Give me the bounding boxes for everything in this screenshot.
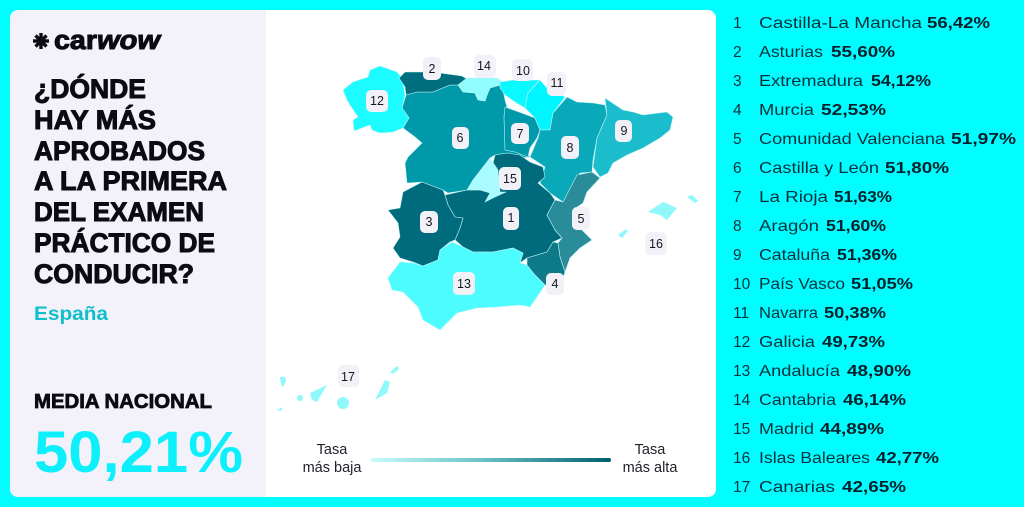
rank 2 <box>733 44 895 61</box>
rank 3 <box>733 73 931 90</box>
label 10: 10 <box>516 64 530 78</box>
region: Cantabria <box>458 78 503 101</box>
rank 1: 1 <box>733 15 742 32</box>
rank 1: Castilla-La Mancha <box>759 15 922 32</box>
region: Islas Baleares <box>618 195 698 238</box>
label 14 <box>474 55 496 78</box>
rank 5: Comunidad Valenciana <box>759 131 945 148</box>
label 16 <box>645 232 667 255</box>
legend: colour scale <box>303 442 678 476</box>
rank 9 <box>733 247 897 264</box>
rank 12: Galicia <box>759 334 815 351</box>
map of Spain <box>277 66 698 411</box>
panel: white map card <box>10 10 716 497</box>
rank 10 <box>733 276 913 293</box>
rank 15: 15 <box>733 421 750 438</box>
rank 2: Asturias <box>759 44 823 61</box>
title <box>34 73 227 289</box>
rank 17 <box>733 479 906 496</box>
rank 12: 49,73% <box>822 334 885 351</box>
rank 6: 6 <box>733 160 742 177</box>
region: Canarias <box>277 366 399 411</box>
map number labels <box>338 55 667 387</box>
region: Aragón <box>530 97 607 202</box>
ranking list <box>733 15 1016 496</box>
rank 16: Islas Baleares <box>759 450 870 467</box>
rank 14 <box>733 392 906 409</box>
national average value: 50,21% <box>34 420 243 485</box>
rank 17: Canarias <box>759 479 835 496</box>
rank 6: Castilla y León <box>759 160 879 177</box>
rank 7: 7 <box>733 189 742 206</box>
label 16: 16 <box>649 237 663 251</box>
region: Comunidad Valenciana <box>547 172 600 272</box>
rank 5: 5 <box>733 131 742 148</box>
label 13 <box>453 272 475 295</box>
label 9 <box>615 120 632 142</box>
title: DEL EXAMEN <box>34 197 204 227</box>
heading: media nacional: MEDIA NACIONAL <box>34 391 212 413</box>
label 3 <box>420 211 438 233</box>
legend high label: Tasa <box>635 442 666 458</box>
legend gradient bar <box>371 458 611 462</box>
rank 9: 9 <box>733 247 742 264</box>
rank 11 <box>733 305 886 322</box>
rank 11: 11 <box>733 305 749 322</box>
rank 15: Madrid <box>759 421 814 438</box>
title: ¿DÓNDE <box>34 73 146 104</box>
label 8: 8 <box>567 141 574 155</box>
logo wordmark <box>54 25 162 55</box>
label 6 <box>452 127 469 149</box>
region: País Vasco <box>500 80 540 108</box>
label 17 <box>338 365 359 387</box>
rank 15 <box>733 421 884 438</box>
region: Castilla y León <box>402 85 530 193</box>
rank 13: Andalucía <box>759 363 840 380</box>
rank 3: Extremadura <box>759 73 863 90</box>
rank 1: 56,42% <box>927 15 990 32</box>
rank 11: 50,38% <box>824 305 886 322</box>
rank 8 <box>733 218 886 235</box>
legend high label: más alta <box>623 460 678 476</box>
rank 13 <box>733 363 911 380</box>
rank 6: 51,80% <box>885 160 949 177</box>
rank 17: 17 <box>733 479 750 496</box>
label 3: 3 <box>426 215 433 229</box>
label 12: 12 <box>370 94 384 108</box>
rank 8: 8 <box>733 218 742 235</box>
rank 8: 51,60% <box>826 218 886 235</box>
region: Andalucía <box>388 242 545 330</box>
label 7: 7 <box>517 127 524 141</box>
region: Asturias <box>399 72 467 95</box>
rank 15: 44,89% <box>820 421 884 438</box>
logo wordmark: car <box>54 25 98 55</box>
rank 17: 42,65% <box>842 479 906 496</box>
rank 10: 51,05% <box>851 276 913 293</box>
rank 13: 13 <box>733 363 750 380</box>
rank 7: La Rioja <box>759 189 828 206</box>
label 5 <box>572 207 590 230</box>
region: Cataluña <box>593 98 673 177</box>
title: PRÁCTICO DE <box>34 227 215 258</box>
rank 4 <box>733 102 886 119</box>
region: Navarra <box>525 80 565 130</box>
label 11 <box>547 72 566 96</box>
rank 16: 16 <box>733 450 750 467</box>
rank 12: 12 <box>733 334 750 351</box>
rank 4: 52,53% <box>821 102 886 119</box>
rank 14: Cantabria <box>759 392 836 409</box>
logo wordmark: wow <box>97 25 162 55</box>
label 7 <box>511 123 529 144</box>
rank 5 <box>733 131 1016 148</box>
logo: carwow <box>33 25 162 55</box>
legend low label: más baja <box>303 460 362 476</box>
region: Extremadura <box>388 182 463 266</box>
label 17: 17 <box>341 370 355 384</box>
label 10 <box>512 59 533 81</box>
icon: carwow asterisk <box>33 33 49 49</box>
rank 14: 14 <box>733 392 751 409</box>
rank 10: País Vasco <box>759 276 845 293</box>
label 2: 2 <box>429 62 436 76</box>
region: Madrid <box>467 158 506 202</box>
label 1: 1 <box>508 211 515 225</box>
rank 5: 51,97% <box>951 131 1016 148</box>
rank 14: 46,14% <box>843 392 906 409</box>
label 12 <box>366 90 388 112</box>
rank 16: 42,77% <box>876 450 939 467</box>
label 9: 9 <box>621 124 628 138</box>
title: HAY MÁS <box>34 104 156 135</box>
label 8 <box>561 136 579 159</box>
rank 9: Cataluña <box>759 247 830 264</box>
rank 4: Murcia <box>759 102 814 119</box>
region: Castilla-La Mancha <box>445 153 562 263</box>
title: A LA PRIMERA <box>34 166 227 196</box>
region: Galicia <box>343 66 409 133</box>
label 4 <box>546 273 564 295</box>
region: Murcia <box>527 242 565 287</box>
rank 4: 4 <box>733 102 742 119</box>
label 11: 11 <box>551 76 564 90</box>
label 1 <box>503 207 519 230</box>
label 4: 4 <box>552 277 559 291</box>
label 13: 13 <box>457 277 471 291</box>
legend low label: Tasa <box>317 442 348 458</box>
label 15: 15 <box>503 172 517 186</box>
rank 13: 48,90% <box>847 363 911 380</box>
title: CONDUCIR? <box>34 259 194 289</box>
label 6: 6 <box>457 131 464 145</box>
rank 16 <box>733 450 939 467</box>
subtitle: España: España <box>34 304 108 325</box>
rank 3: 54,12% <box>871 73 931 90</box>
rank 7 <box>733 189 892 206</box>
region: La Rioja <box>504 107 540 157</box>
rank 12 <box>733 334 885 351</box>
label 2 <box>423 57 441 80</box>
label 15 <box>499 167 521 190</box>
rank 2: 2 <box>733 44 742 61</box>
rank 6 <box>733 160 949 177</box>
title: APROBADOS <box>34 136 205 166</box>
rank 11: Navarra <box>759 305 818 322</box>
label 5: 5 <box>578 212 585 226</box>
rank 8: Aragón <box>759 218 819 235</box>
panel: left title sidebar <box>10 10 266 497</box>
rank 7: 51,63% <box>834 189 892 206</box>
rank 3: 3 <box>733 73 742 90</box>
rank 1 <box>733 15 990 32</box>
rank 2: 55,60% <box>831 44 895 61</box>
rank 10: 10 <box>733 276 751 293</box>
rank 9: 51,36% <box>837 247 897 264</box>
label 14: 14 <box>477 59 491 73</box>
